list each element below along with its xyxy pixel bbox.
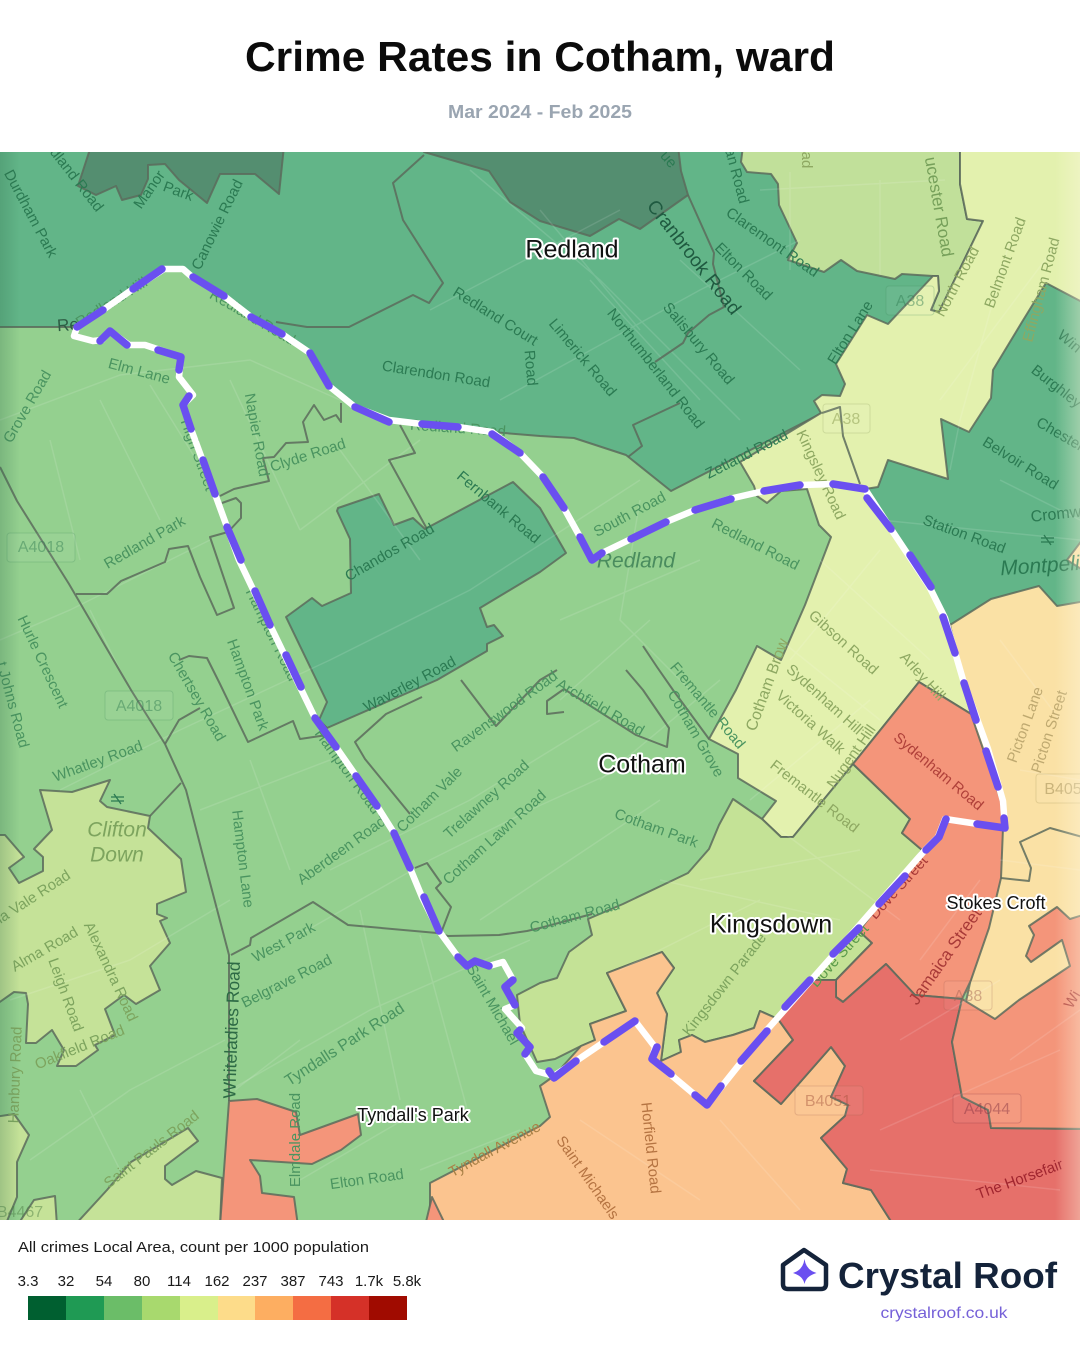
legend scale labels: 743 bbox=[318, 1273, 344, 1290]
place name: Clifton Down: Clifton bbox=[87, 819, 147, 842]
area: red-orange sliver bbox=[426, 1196, 444, 1220]
partially hidden roads beneath the ward outline: High Street bbox=[177, 417, 219, 494]
legend scale labels bbox=[18, 1273, 422, 1290]
road labels: dark green areas: Durdham Park bbox=[0, 167, 61, 261]
road labels: yellow areas: Effingham Road bbox=[1019, 236, 1064, 344]
road labels: yellow areas bbox=[743, 152, 1064, 836]
road labels: light green areas: Chertsey Road bbox=[164, 649, 229, 744]
road labels: light green areas: Cotham Vale bbox=[393, 763, 466, 836]
area: south-west yellow patch bbox=[0, 1114, 29, 1226]
road labels: yellow-green areas: Alma Road bbox=[8, 924, 81, 975]
road labels: light green areas: Redland Road bbox=[709, 515, 802, 574]
road labels: dark green areas: Salisbury Road bbox=[659, 299, 738, 388]
road labels: cream, orange and red areas bbox=[446, 685, 1080, 1223]
road labels: light green areas: Ravenswood Road bbox=[448, 667, 561, 756]
subtitle: date range: Mar 2024 - Feb 2025 bbox=[448, 102, 632, 122]
road shield labels: A4018 bbox=[116, 698, 162, 715]
partially hidden roads beneath the ward outline: Dove Street bbox=[807, 920, 873, 991]
road labels: dark green areas: Waverley Road bbox=[361, 653, 459, 716]
road labels: dark green areas: Canowie Road bbox=[188, 177, 247, 273]
region boundary lines bbox=[0, 155, 1080, 1101]
area: Cotham dark green block bbox=[286, 482, 566, 728]
area: pale yellow A38 corridor bbox=[709, 146, 1080, 837]
partially hidden roads beneath the ward outline: Dove Street bbox=[866, 852, 932, 923]
road labels: light green areas: Whiteladies Road bbox=[219, 961, 244, 1099]
road labels: light green areas: West Park bbox=[249, 919, 319, 966]
area: Clifton Down bbox=[0, 780, 186, 1066]
legend scale labels: 32 bbox=[58, 1273, 74, 1290]
area: darkest north-west patch bbox=[78, 146, 284, 203]
legend scale labels: 5.8k bbox=[393, 1273, 422, 1290]
road shield labels: A4018 bbox=[18, 539, 64, 556]
partially hidden roads beneath the ward outline: Redland Hill bbox=[73, 274, 151, 331]
area: cream Montpelier bbox=[950, 586, 1080, 1030]
road labels: light green areas: Aberdeen Road bbox=[294, 813, 389, 888]
legend scale labels: 162 bbox=[204, 1273, 230, 1290]
road labels: yellow-green areas: Alexandra Road bbox=[80, 919, 141, 1024]
road labels: light green areas: Elmdale Road bbox=[287, 1093, 304, 1187]
legend scale labels: 237 bbox=[242, 1273, 268, 1290]
road labels: light green areas: Saint Michael bbox=[463, 961, 522, 1048]
area: cream sliver on right edge bbox=[1066, 542, 1080, 570]
road shield labels: A38 bbox=[896, 293, 924, 310]
area: orange city centre bbox=[430, 952, 894, 1226]
brand url: crystalroof.co.uk bbox=[880, 1305, 1009, 1322]
road labels: cream, orange and red areas: Sydenham Road bbox=[890, 729, 987, 814]
road labels: yellow areas: Cotham Brow bbox=[743, 636, 792, 733]
area: east red-orange bbox=[952, 907, 1080, 1129]
legend bbox=[18, 1239, 422, 1320]
area name: Tyndall's Park: Tyndall's Park bbox=[357, 1105, 470, 1125]
partially hidden roads beneath the ward outline: Hampton Road bbox=[242, 586, 301, 684]
area: red Horsefair bbox=[754, 964, 1080, 1226]
road labels: light green areas: Cotham Grove bbox=[664, 687, 727, 780]
road labels: yellow areas: Nugent Hill bbox=[824, 722, 880, 792]
road labels: light green areas: Elton Road bbox=[329, 1166, 405, 1193]
legend scale labels: 114 bbox=[167, 1273, 191, 1290]
road labels: yellow areas: Kingsley Road bbox=[792, 427, 849, 522]
road labels: dark green areas: gan Road bbox=[719, 138, 752, 205]
road labels: dark green areas: ue bbox=[657, 148, 680, 172]
road labels: yellow-green areas: Leigh Road bbox=[44, 956, 87, 1034]
road labels: light green areas: Fremantle Road bbox=[666, 659, 748, 752]
area: Saint Pauls yellow patch bbox=[74, 1128, 222, 1226]
ward boundary: Cotham bbox=[74, 269, 1005, 1105]
place name: Redland italic: Redland bbox=[597, 550, 676, 573]
road labels: light green areas: Cotham Lawn Road bbox=[440, 787, 550, 888]
road labels: cream, orange and red areas: Picton Street bbox=[1028, 688, 1071, 775]
area: darkest north patch bbox=[424, 146, 688, 236]
road labels: yellow areas: Arley Hill bbox=[896, 649, 949, 704]
area: Kingsdown bbox=[517, 764, 922, 1062]
road labels: dark green areas: Elton Lane bbox=[824, 298, 877, 368]
road labels: yellow-green areas: Oakfield Road bbox=[33, 1022, 127, 1073]
road labels: yellow-green areas: Hanbury Road bbox=[5, 1026, 26, 1124]
road labels: light green areas: Whatley Road bbox=[51, 737, 145, 786]
map edge fade: left bbox=[0, 152, 20, 1220]
brand name: Crystal Roof bbox=[838, 1255, 1058, 1296]
place name: Montpelier: Montpeli bbox=[1000, 552, 1080, 580]
road labels: light green areas: Cotham Park bbox=[612, 806, 701, 852]
area: Sydenham and Stokes Croft bbox=[836, 682, 1003, 1002]
faint road network bbox=[0, 170, 1080, 1210]
title: Crime Rates in Cotham, ward bbox=[245, 33, 835, 80]
road labels: light green areas: Tyndalls Park Road bbox=[282, 1000, 408, 1090]
road labels: dark green areas: Claremont Road bbox=[723, 204, 822, 281]
road shield labels: B4051 bbox=[805, 1093, 851, 1110]
road shield labels: A4044 bbox=[964, 1101, 1010, 1118]
road labels: cream, orange and red areas: Picton Lane bbox=[1004, 685, 1047, 765]
road labels: cream, orange and red areas: Tyndall Avenue bbox=[446, 1118, 544, 1181]
place name: Clifton Down bbox=[88, 821, 146, 862]
road labels: dark green areas: Redland Court bbox=[450, 284, 542, 350]
road labels: cream, orange and red areas: Jamaica Street bbox=[905, 904, 986, 1008]
legend scale labels: 387 bbox=[280, 1273, 306, 1290]
partially hidden roads beneath the ward outline: Re bbox=[56, 315, 79, 335]
road labels: yellow areas: Sydenham Hill bbox=[783, 661, 866, 738]
road labels: light green areas: Elm Lane bbox=[106, 355, 172, 388]
legend title: All crimes Local Area, count per 1000 population bbox=[18, 1239, 369, 1256]
road labels: dark green areas: Limerick Road bbox=[545, 315, 620, 400]
road labels: dark green areas: Chandos Road bbox=[342, 520, 437, 585]
legend scale labels: 3.3 bbox=[18, 1273, 38, 1290]
road labels: light green areas: Redland Park bbox=[101, 512, 189, 573]
area name: Redland: Redland bbox=[525, 236, 619, 264]
partially hidden roads beneath the ward outline: Redland Road bbox=[410, 417, 506, 440]
area name: Kingsdown: Kingsdown bbox=[710, 911, 832, 939]
road labels: dark green areas: dland Road bbox=[46, 144, 107, 215]
icon: house with star bbox=[783, 1250, 826, 1289]
road labels: cream, orange and red areas: Horfield Road bbox=[637, 1101, 664, 1194]
logo: Crystal Roof bbox=[783, 1250, 1058, 1322]
map edge fade: right bbox=[1055, 152, 1080, 1220]
road labels: yellow-green areas bbox=[0, 867, 770, 1192]
road shield labels: A38 bbox=[832, 411, 860, 428]
road labels: light green areas: Hampton Lane bbox=[228, 809, 257, 909]
road labels: dark green areas: Park bbox=[161, 178, 196, 205]
road labels: yellow areas: ad bbox=[798, 152, 815, 168]
road labels: light green areas: Napier Road bbox=[241, 392, 272, 478]
area: B4467 yellow patch bbox=[20, 1195, 58, 1220]
station icon: Redland bbox=[1041, 535, 1054, 545]
station icon: Clifton Down bbox=[111, 794, 124, 804]
legend scale labels: 1.7k bbox=[355, 1273, 384, 1290]
Cranbrook Road label: Cranbrook Road bbox=[642, 196, 745, 319]
road labels: light green areas: Clyde Road bbox=[268, 435, 348, 476]
area: Redland dark green bbox=[0, 146, 1080, 625]
road labels: yellow areas: Fremantle Road bbox=[767, 757, 862, 836]
legend scale labels: 80 bbox=[134, 1273, 150, 1290]
road labels: yellow areas: ucester Road bbox=[921, 155, 957, 258]
road labels: light green areas: Belgrave Road bbox=[239, 951, 335, 1012]
road labels: dark green areas: Fernbank Road bbox=[453, 468, 543, 547]
partially hidden roads beneath the ward outline bbox=[56, 274, 932, 991]
road labels: light green areas bbox=[0, 355, 802, 1193]
area name: Stokes Croft: Stokes Croft bbox=[946, 893, 1046, 913]
road labels: light green areas: Trelawney Road bbox=[441, 757, 533, 842]
partially hidden roads beneath the ward outline: Redland Road bbox=[206, 286, 298, 349]
road shield labels bbox=[0, 286, 1080, 1221]
road labels: yellow areas: Victoria Walk bbox=[772, 687, 849, 758]
road labels: yellow-green areas: Saint Pauls Road bbox=[101, 1107, 203, 1192]
area: north-east yellow green bbox=[741, 146, 983, 312]
road labels: light green areas: Cotham Road bbox=[528, 896, 622, 937]
road labels: dark green areas: Northumberland Road bbox=[603, 305, 708, 432]
road labels: dark green areas: Manor bbox=[130, 167, 169, 212]
road labels: yellow-green areas: Kingsdown Parade bbox=[679, 930, 770, 1040]
road labels: light green areas: Hampton Park bbox=[223, 637, 272, 733]
road labels: yellow areas: North Road bbox=[932, 244, 983, 320]
road labels: dark green areas: Belvoir Road bbox=[979, 434, 1061, 494]
road labels: yellow areas: Belmont Road bbox=[981, 215, 1030, 310]
road labels: dark green areas: Road bbox=[520, 349, 541, 387]
place name: Clifton Down: Down bbox=[90, 844, 144, 867]
road labels: dark green areas: Clarendon Road bbox=[381, 358, 491, 391]
road shield labels: A38 bbox=[954, 988, 982, 1005]
road labels: cream, orange and red areas: The Horsefair bbox=[974, 1156, 1065, 1203]
area name: Cotham: Cotham bbox=[598, 751, 686, 779]
area: Tyndall's Park red-orange bbox=[220, 1099, 361, 1226]
road labels: light green areas: Archfield Road bbox=[553, 676, 647, 739]
road labels: dark green areas: Elton Road bbox=[711, 239, 776, 304]
partially hidden roads beneath the ward outline: Hampton Road bbox=[311, 726, 384, 818]
road labels: cream, orange and red areas: Saint Michaels bbox=[552, 1133, 622, 1223]
legend colour bar bbox=[28, 1296, 407, 1320]
road labels: dark green areas: Station Road bbox=[921, 512, 1008, 557]
road labels: light green areas: Grove Road bbox=[0, 367, 55, 446]
road labels: light green areas: South Road bbox=[591, 488, 669, 541]
road labels: dark green areas: Zetland Road bbox=[703, 427, 791, 483]
road labels: light green areas: Hurle Crescent bbox=[14, 613, 72, 711]
legend scale labels: 54 bbox=[96, 1273, 112, 1290]
road labels: dark green areas bbox=[0, 138, 1080, 716]
road labels: yellow areas: Gibson Road bbox=[805, 607, 882, 678]
